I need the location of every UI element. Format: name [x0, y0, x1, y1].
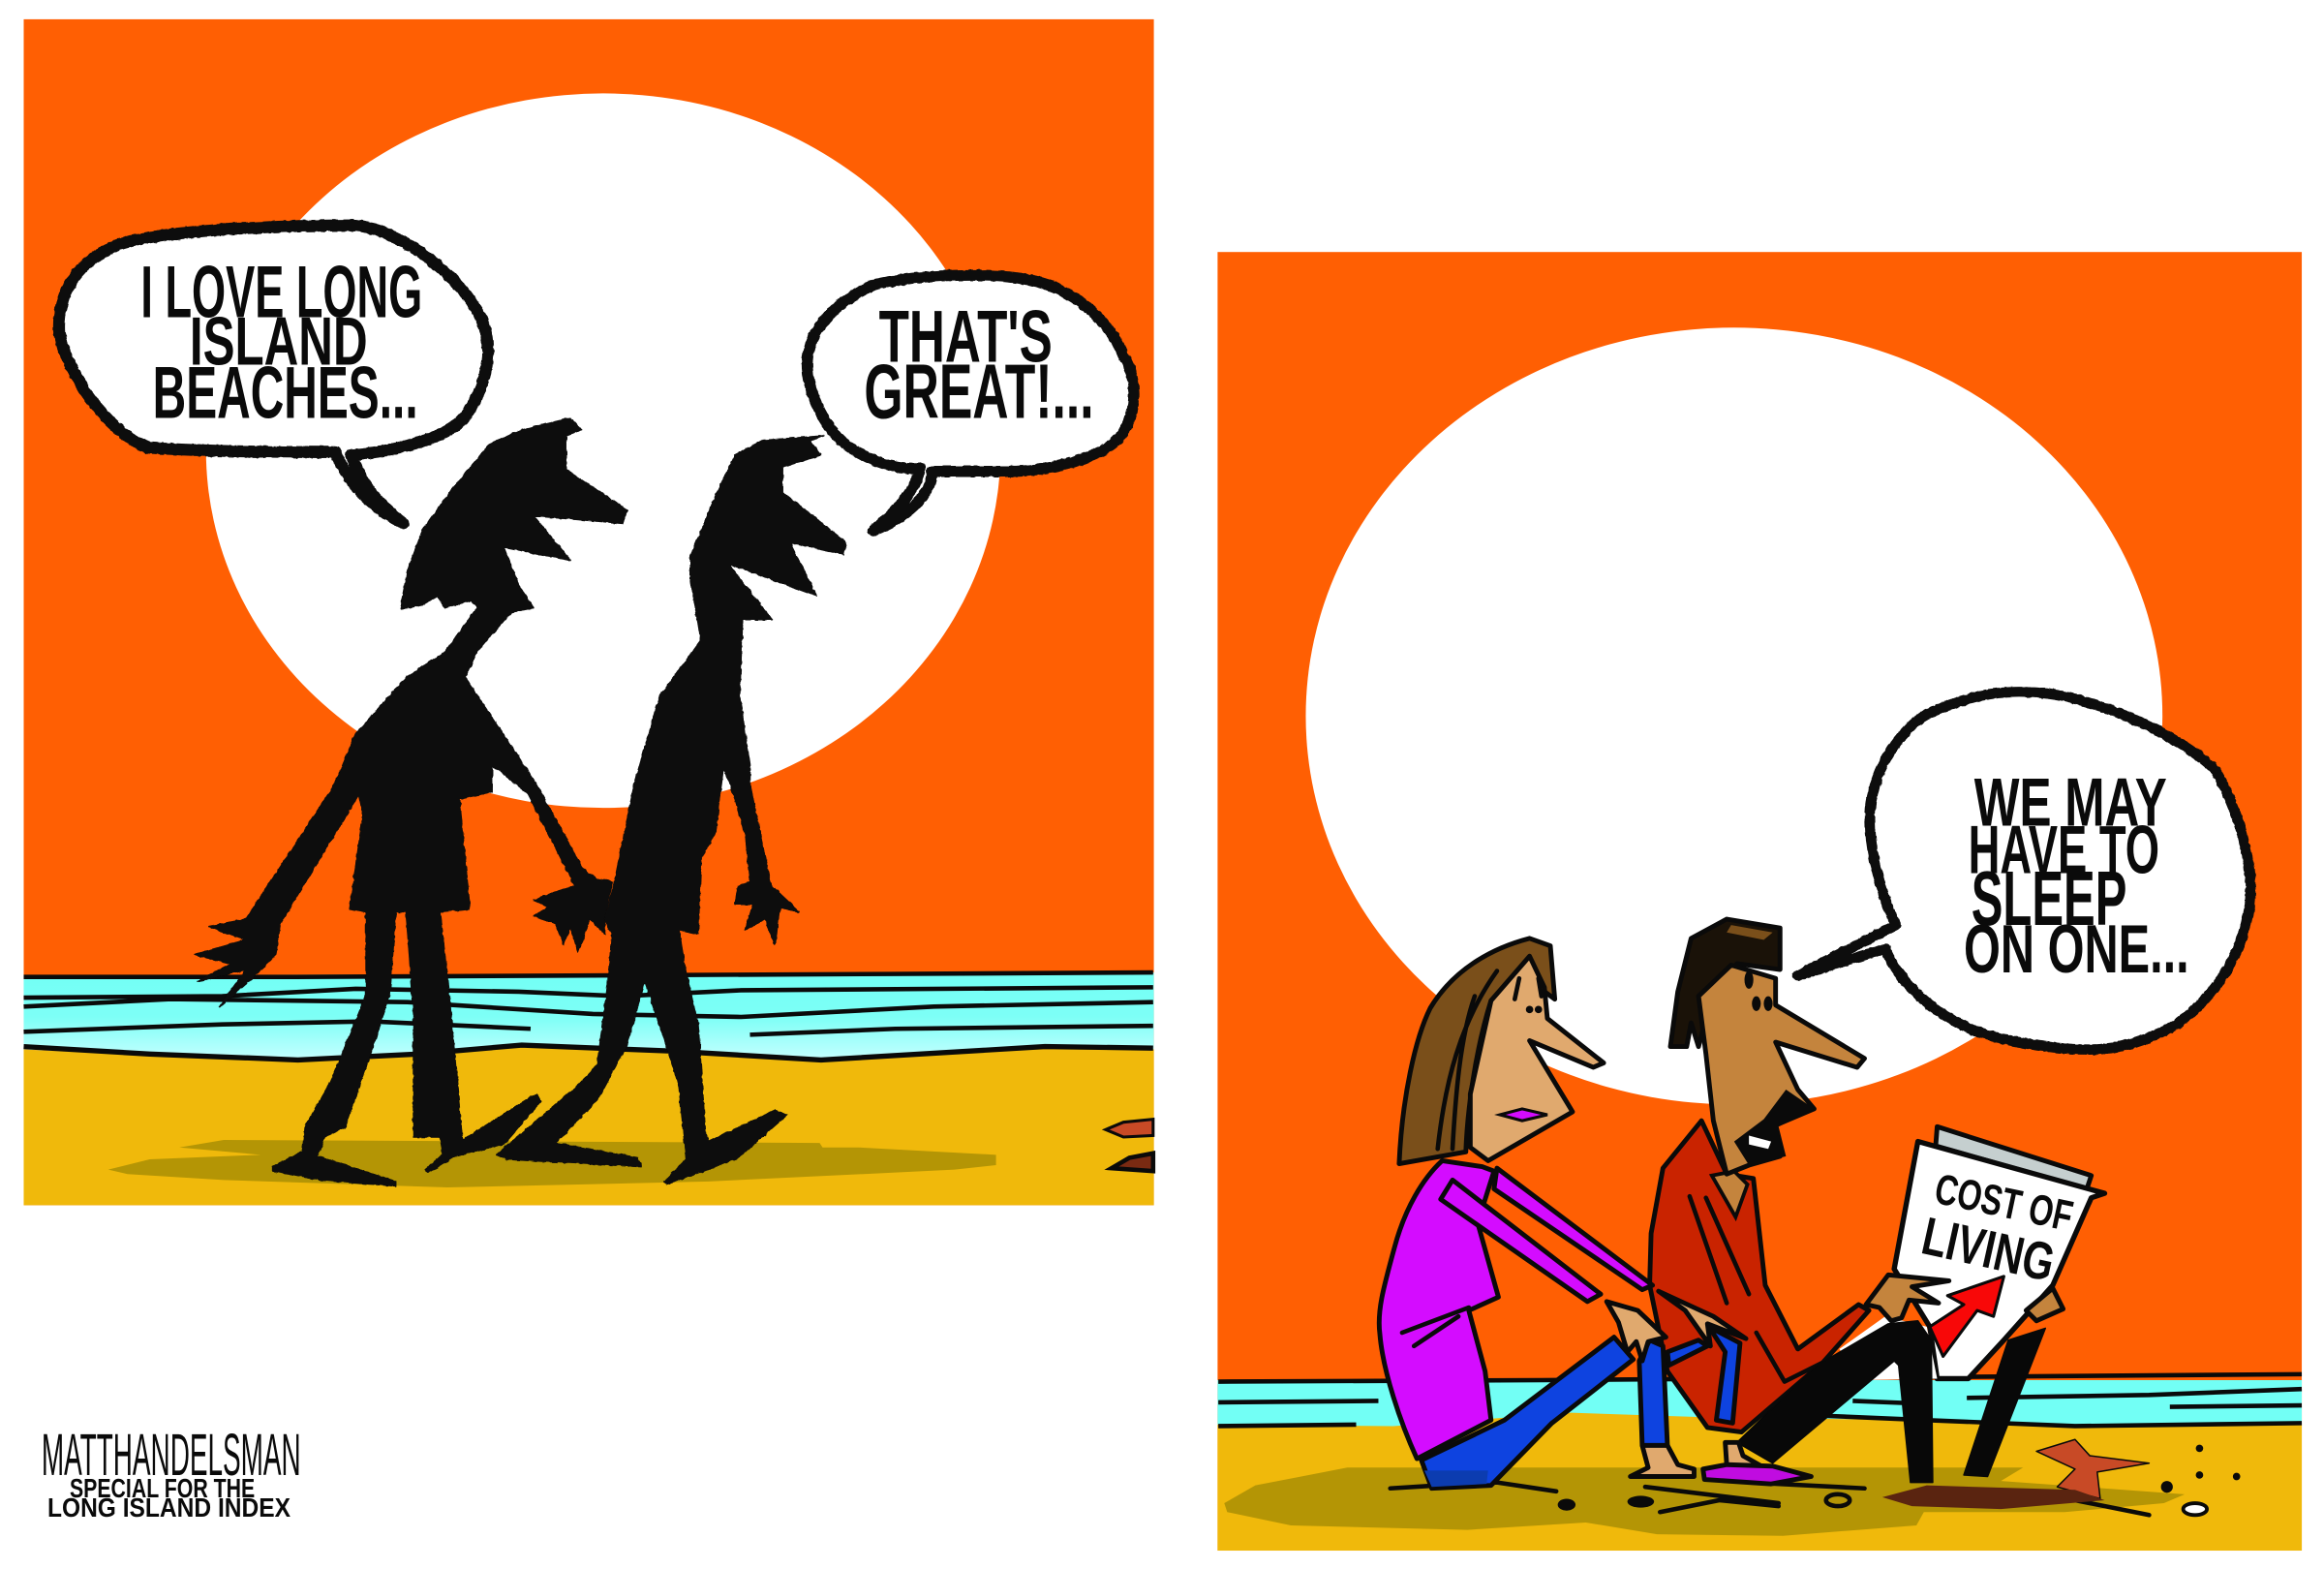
- sand: [23, 1047, 1154, 1205]
- woman: blue jeans: [1422, 1327, 1740, 1489]
- man: slipper: [1703, 1464, 1811, 1484]
- woman: face: [1470, 956, 1604, 1160]
- woman: magenta top: [1379, 1160, 1498, 1459]
- speech bubble: That's great: [808, 275, 1134, 531]
- artist signature: LONG ISLAND INDEX: [47, 1492, 291, 1523]
- artist signature: SPECIAL FOR THE: [70, 1473, 255, 1503]
- man: foot: [1726, 1442, 1766, 1469]
- man: shirt: [1650, 1121, 1869, 1432]
- man: face: [1698, 965, 1865, 1174]
- man: hands on magazine: [1866, 1275, 2064, 1321]
- speech bubble: we may have to sleep on one: SLEEP: [1972, 855, 2126, 941]
- man: shirt folds and collar: [1690, 1171, 1823, 1382]
- speech bubble: That's great: GREAT!...: [864, 349, 1094, 435]
- speech bubble: we may have to sleep on one: [1798, 692, 2250, 1050]
- wave lines: [1218, 1374, 2302, 1426]
- silhouette: woman: [497, 436, 846, 1184]
- woman: hair strands: [1438, 971, 1497, 1149]
- woman: sleeves: [1441, 1168, 1653, 1302]
- speech bubble: we may have to sleep on one: ON ONE...: [1964, 910, 2189, 987]
- woman: eyes and lips: [1500, 978, 1547, 1121]
- man: far leg: [1964, 1328, 2045, 1476]
- panel: silhouettes on beach: [23, 19, 1154, 1205]
- ground shadow: [1224, 1467, 2185, 1536]
- wave lines: [23, 972, 1153, 1060]
- speech bubble: I love Long Island beaches: [59, 226, 488, 523]
- text: MATTHANDELSMAN: [42, 1422, 301, 1488]
- orange sky: [23, 19, 1154, 1205]
- man: black trousers: [1737, 1321, 1933, 1483]
- sand pebbles and scratches: [1391, 1445, 2241, 1515]
- speech bubble: I love Long Island beaches: ISLAND: [190, 303, 368, 380]
- magazine: cost of living: [1839, 1126, 2104, 1380]
- speech bubble: we may have to sleep on one: HAVE TO: [1969, 812, 2159, 888]
- woman: top creases: [1402, 1308, 1469, 1346]
- man: hair: [1670, 919, 1780, 1047]
- ocean water: [1217, 1380, 2302, 1428]
- white sun: [1305, 327, 2162, 1104]
- orange sky: [1217, 252, 2302, 1551]
- starfish: [2036, 1439, 2149, 1498]
- ocean water: [23, 972, 1154, 1061]
- speech bubble: That's great: THAT'S: [879, 295, 1053, 378]
- woman: hair: [1399, 938, 1555, 1164]
- speech bubble: I love Long Island beaches: I LOVE LONG: [140, 252, 422, 334]
- speech bubble: I love Long Island beaches: BEACHES...: [153, 353, 418, 435]
- panel: couple reading cost of living: [1217, 252, 2302, 1551]
- man: beard and mouth: [1734, 971, 1814, 1165]
- woman: foot and slipper: [1631, 1445, 1694, 1476]
- woman: hands on knee: [1606, 1291, 1746, 1361]
- magazine: cost of living: COST OF: [1931, 1165, 2077, 1241]
- man: hair highlight: [1727, 925, 1773, 939]
- speech bubble: we may have to sleep on one: WE MAY: [1974, 764, 2167, 841]
- ground shadow: [108, 1140, 996, 1187]
- artist signature: [42, 1422, 301, 1523]
- white sun: [206, 93, 1000, 808]
- starfish fragments at panel edge: [1106, 1120, 1153, 1171]
- magazine: cost of living: LIVING: [1917, 1206, 2060, 1293]
- silhouette: man: [195, 418, 627, 1185]
- sand: [1217, 1413, 2302, 1551]
